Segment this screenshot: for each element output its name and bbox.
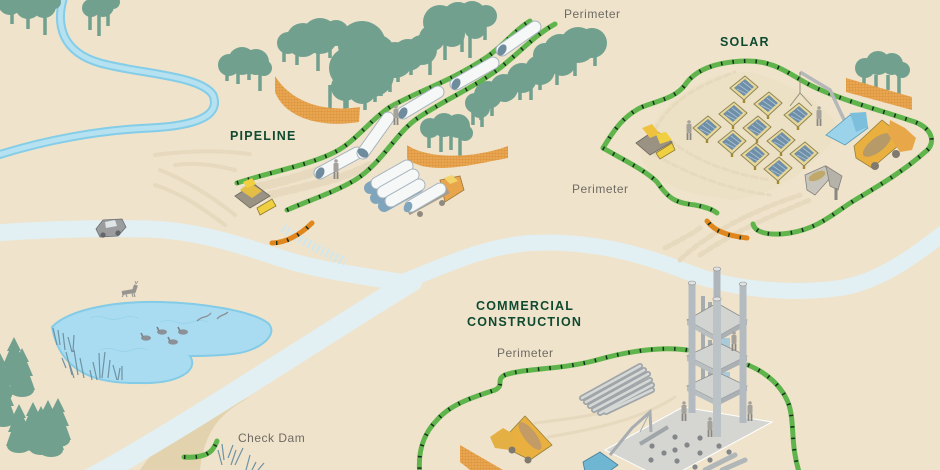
workers on pipeline [334,105,398,179]
dump truck: solar [854,120,916,170]
crane on solar site [790,72,868,145]
tree mass: right of pipeline [465,27,607,127]
pond [52,302,271,383]
label: perimeter pipeline: Perimeter [564,7,621,21]
heading: commercial construction: CONSTRUCTION [467,315,582,329]
solar disturbed pad [640,72,840,260]
label: check dam: Check Dam [238,431,305,445]
steel beams on slab [640,427,668,444]
pipe segments along trench [314,27,535,180]
pipeline perimeter: upper [237,21,530,183]
truck carrying pipes [402,175,464,217]
small hopper truck: solar [805,166,842,200]
ducks [141,327,188,345]
reeds at pond [53,328,122,380]
solar panel array [693,76,818,184]
solar perimeter: main [603,61,932,234]
tree cluster: top centre left [82,0,120,36]
deer [122,281,138,297]
concrete frame building [687,267,747,437]
tree: below pipeline [420,113,473,158]
commercial perimeter: right [748,365,800,470]
pipes bottom right [705,455,745,470]
tree cluster: top left [0,0,61,35]
sand patch near check dam [140,396,252,470]
sediment barrier: pipeline [272,223,312,243]
commercial site tracks [535,397,675,437]
crane: commercial [583,412,651,470]
workers on solar site [686,106,822,140]
workers on building [682,331,752,437]
heading: pipeline: PIPELINE [230,129,297,143]
check dam [184,441,217,457]
tree mass: forest behind pipeline [277,1,497,110]
foundation slab [605,407,772,470]
foundation piles [648,434,732,470]
sediment barrier: solar [707,221,747,238]
birds [197,312,228,321]
heading: commercial construction: COMMERCIAL [476,299,574,313]
service vehicle [96,219,126,238]
creek [0,0,215,156]
label: perimeter commercial: Perimeter [497,346,554,360]
silt fence: below pipeline [407,145,508,168]
label: perimeter solar: Perimeter [572,182,629,196]
stacked pipes [370,166,419,206]
tree: single left of fence [218,47,272,91]
tree behind solar fence [855,51,910,94]
reeds at check dam [218,444,264,470]
pipeline perimeter: lower [287,24,555,210]
bulldozer: solar [636,124,675,159]
silt fence: solar [846,78,912,110]
heading: solar: SOLAR [720,35,770,49]
pipeline disturbed ground [155,150,370,262]
stacked concrete pipes [582,366,652,413]
commercial perimeter: left [419,349,687,470]
dump truck: commercial [490,416,552,464]
solar perimeter: left [603,148,717,213]
silt fence: left of pipeline [275,76,360,124]
river network [0,229,940,470]
silt fence: commercial [460,445,503,470]
conifer trees [0,337,71,457]
heading: commercial construction [467,299,582,329]
bulldozer [235,178,276,215]
